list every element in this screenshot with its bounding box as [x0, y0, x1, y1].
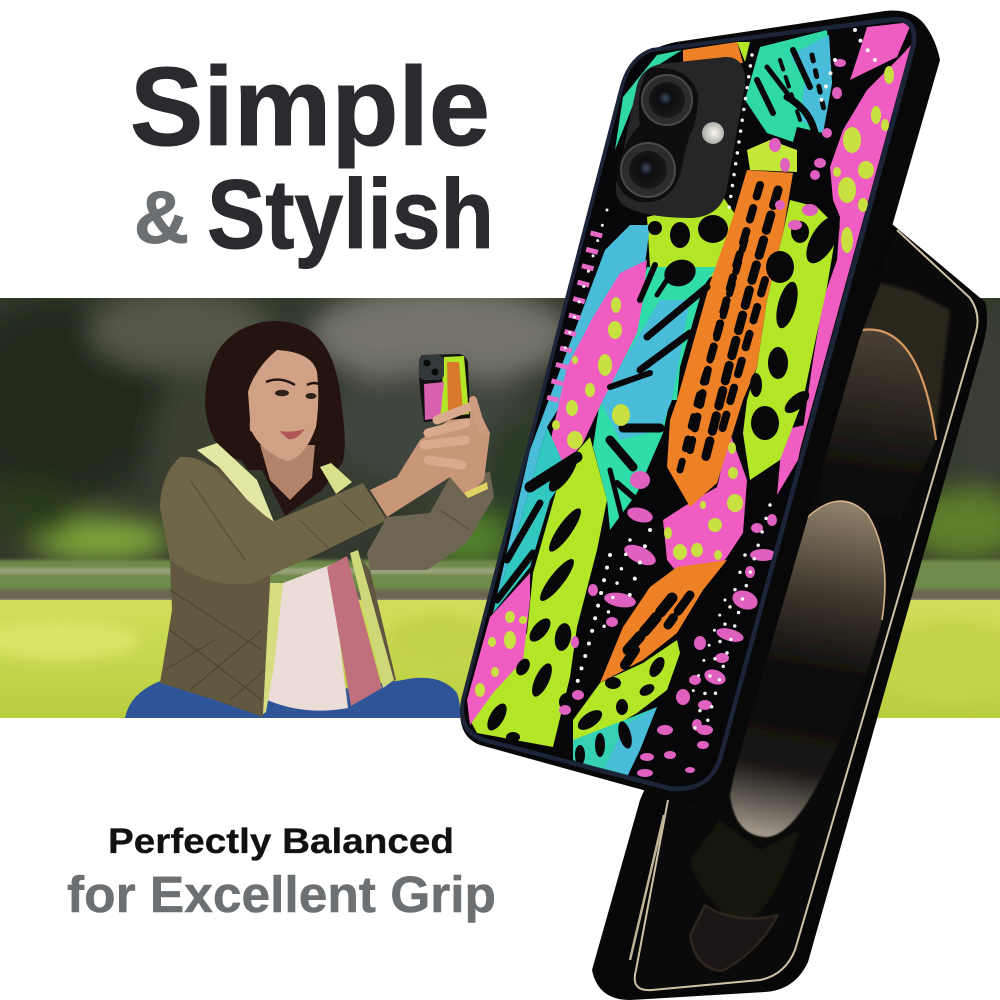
lower lobes [692, 822, 797, 918]
caption: Perfectly Balanced: Perfectly Balanced [108, 822, 454, 861]
neck [260, 445, 315, 500]
collar left [197, 443, 274, 522]
hair back [205, 321, 345, 516]
woman [125, 321, 494, 718]
pattern artwork [450, 10, 930, 800]
lime lining left [263, 583, 283, 714]
front phone: patterned case [450, 10, 940, 803]
heading: Simple: Simple [130, 45, 490, 169]
jeans [125, 678, 460, 718]
jacket far side panel [360, 559, 396, 684]
stripes on teal [497, 50, 824, 600]
collar right [320, 463, 352, 494]
black spots on lime [483, 211, 846, 765]
caption: for Excellent Grip: for Excellent Grip [67, 866, 496, 923]
white speckles [563, 30, 875, 745]
flash [702, 122, 724, 144]
plaid shirt [327, 556, 382, 706]
shirt [267, 565, 348, 711]
wallpaper swirls [690, 282, 950, 971]
case body [460, 11, 940, 803]
camera island [616, 57, 745, 218]
big dome and lobe [730, 501, 885, 837]
jacket torso [160, 457, 272, 717]
near arm [160, 457, 387, 584]
lens carrier [617, 68, 698, 202]
gold rim [635, 230, 978, 990]
back phone black body [592, 224, 987, 1000]
bottom gold edge [630, 815, 664, 960]
sleeve folds [190, 480, 470, 560]
photo band: woman taking a selfie in a park [0, 285, 1000, 718]
face [240, 350, 318, 461]
lime lining right [350, 550, 394, 688]
lower lens [621, 143, 675, 197]
lawn and path [0, 560, 1000, 718]
back phone: device seen behind the case [592, 224, 987, 1000]
left-edge pink bars [550, 232, 597, 410]
quilting lines [165, 590, 265, 700]
eyes, brows and lips [266, 380, 320, 439]
colour patches [467, 22, 912, 777]
upper wedge [864, 282, 951, 434]
black marks on orange [625, 185, 778, 665]
yellow spots on pink [475, 66, 894, 697]
heading: Stylish: Stylish [207, 159, 494, 269]
rainbow dome [824, 330, 936, 474]
forest background [0, 285, 1000, 573]
watch cuff [464, 482, 488, 498]
far arm [367, 472, 494, 570]
hair front sweep [240, 381, 262, 470]
navy bezel [460, 17, 917, 791]
hands [370, 400, 490, 517]
fingers [424, 406, 472, 465]
pink blobs on black [559, 59, 846, 777]
heading: ampersand: & [134, 176, 189, 259]
upper lens [642, 75, 692, 125]
small phone in hand [419, 354, 470, 422]
